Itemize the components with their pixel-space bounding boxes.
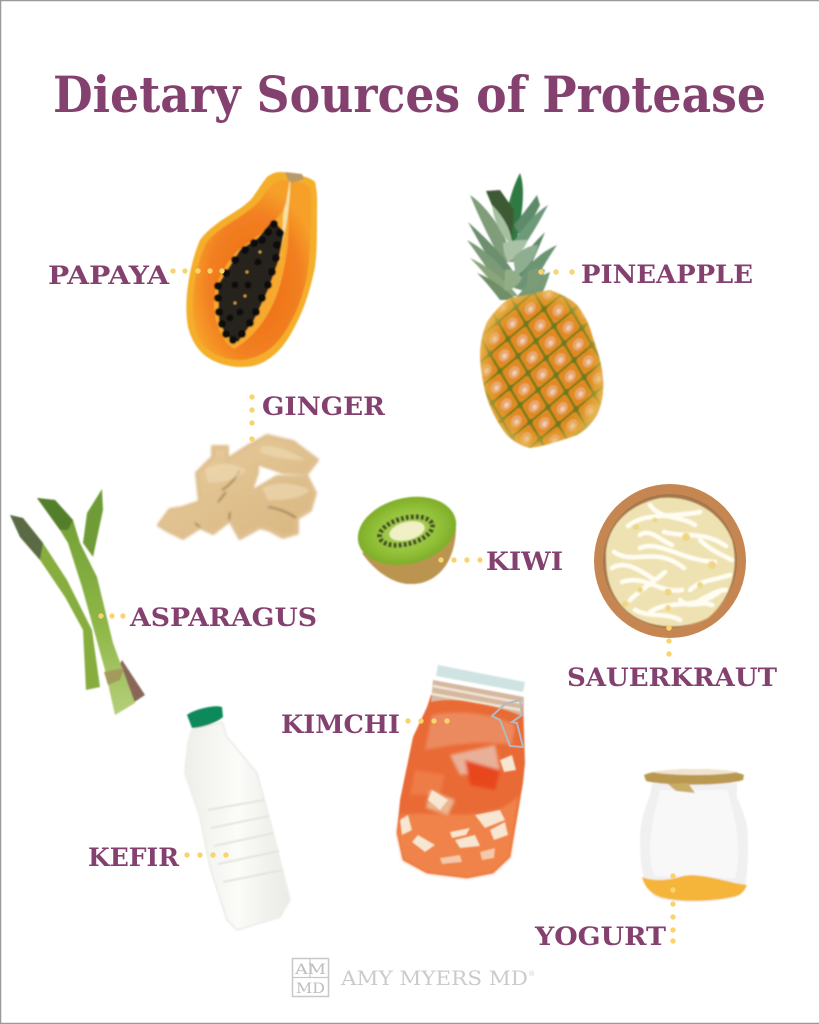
label: kefir <box>88 843 229 872</box>
icon: ginger <box>159 436 317 538</box>
title: Dietary Sources of Protease <box>53 65 766 124</box>
label: ginger <box>249 392 385 442</box>
icon: kimchi jar <box>397 665 525 878</box>
label: asparagus: ASPARAGUS <box>129 603 317 632</box>
label: kimchi <box>281 710 450 739</box>
logo: Amy Myers MD: AMY MYERS MD <box>340 966 528 990</box>
icon: sauerkraut bowl <box>594 484 746 638</box>
label: kefir: KEFIR <box>88 843 179 872</box>
icon: pineapple <box>467 173 603 448</box>
logo: Amy Myers MD: ® <box>529 970 535 978</box>
label: sauerkraut: SAUERKRAUT <box>567 663 777 692</box>
icon: papaya <box>186 172 317 367</box>
logo: Amy Myers MD: MD <box>296 981 325 997</box>
icon: asparagus <box>10 489 145 715</box>
icon: kiwi <box>351 487 463 584</box>
label: papaya <box>48 261 225 290</box>
label: yogurt: YOGURT <box>534 922 666 951</box>
label: ginger: GINGER <box>262 392 385 421</box>
label: sauerkraut <box>567 625 777 692</box>
label: pineapple: PINEAPPLE <box>581 260 753 289</box>
label: kiwi <box>438 547 563 576</box>
logo: Amy Myers MD <box>292 958 535 997</box>
logo: Amy Myers MD: AM <box>294 962 326 978</box>
label: yogurt <box>534 873 676 951</box>
icon: yogurt jar <box>640 769 748 902</box>
label: papaya: PAPAYA <box>48 261 170 290</box>
icon: kefir bottle <box>185 706 290 930</box>
label: kiwi: KIWI <box>486 547 563 576</box>
label: kimchi: KIMCHI <box>281 710 400 739</box>
